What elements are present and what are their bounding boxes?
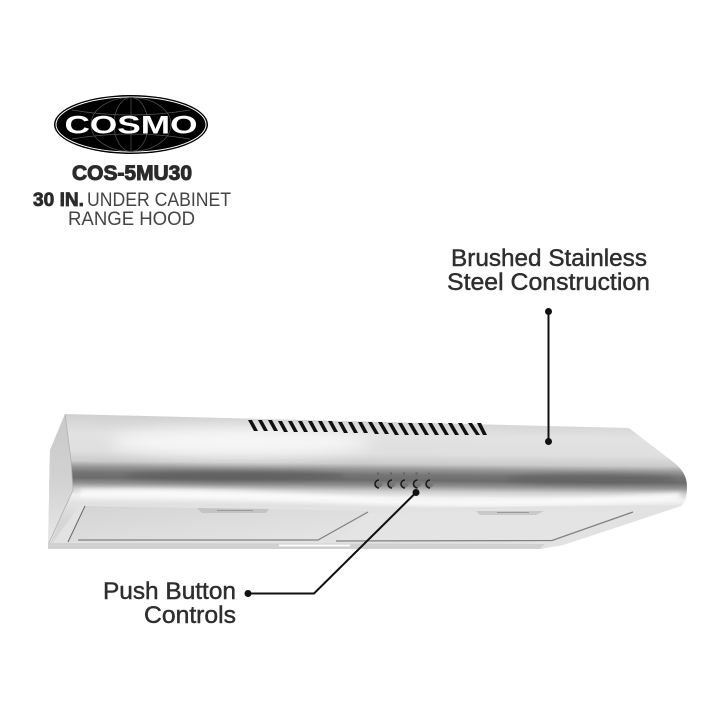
- callout line: stainless steel: [545, 308, 552, 445]
- model number: COS-5MU30: [72, 162, 192, 185]
- glare: [279, 544, 350, 546]
- hood body: [40, 410, 700, 555]
- underside: [48, 505, 690, 549]
- filter panel: left: [68, 506, 370, 542]
- product description: 30 IN.: [33, 189, 84, 211]
- light reflection: [80, 489, 680, 506]
- product description: RANGE HOOD: [68, 208, 195, 230]
- product description: [33, 189, 231, 230]
- callout label: brushed stainless steel: Brushed Stainless: [451, 245, 647, 272]
- product description: UNDER CABINET: [87, 189, 231, 211]
- dark reflection: [125, 471, 345, 481]
- callout label: brushed stainless steel: Steel Construction: [447, 269, 650, 296]
- callout label: brushed stainless steel: [447, 245, 650, 296]
- vent slots: [248, 420, 487, 435]
- filter panel: right: [335, 511, 634, 541]
- control buttons: [375, 472, 434, 488]
- top face highlight: [110, 428, 370, 456]
- callout label: push button controls: Controls: [144, 602, 236, 629]
- logo: COSMO: [54, 95, 208, 154]
- range hood: [40, 410, 700, 555]
- callout line: push buttons: [244, 489, 420, 597]
- bottom trim: [48, 543, 545, 549]
- callout label: push button controls: [103, 578, 236, 629]
- callout label: push button controls: Push Button: [103, 578, 236, 605]
- logo: COSMO: COSMO: [64, 112, 198, 140]
- left side panel: [48, 414, 72, 543]
